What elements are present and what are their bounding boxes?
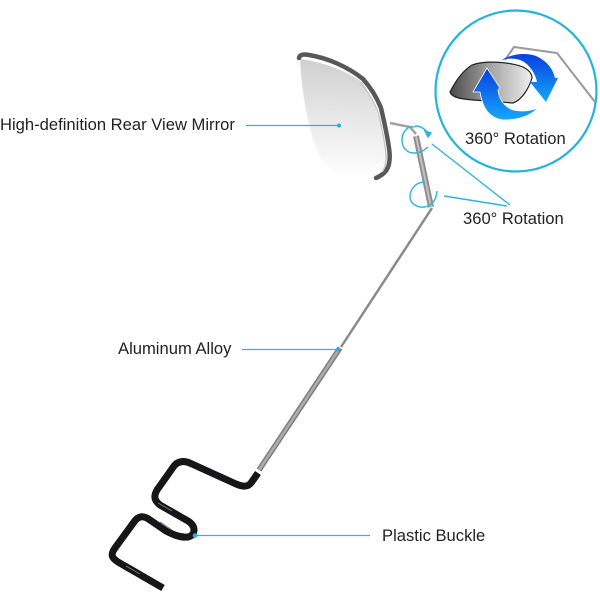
lower arm segment xyxy=(259,348,340,470)
mirror leader line xyxy=(246,124,341,128)
rotation indicators xyxy=(402,126,510,207)
label: plastic buckle: Plastic Buckle xyxy=(382,526,485,545)
inset mirror xyxy=(450,62,532,103)
upper rotation arc xyxy=(402,127,428,153)
mirror frame xyxy=(299,54,390,178)
inset label: 360° Rotation xyxy=(465,129,566,148)
metal arm xyxy=(259,123,432,470)
inset circle xyxy=(436,10,596,172)
inset wire xyxy=(505,47,595,102)
aluminum leader line xyxy=(242,348,340,352)
label: aluminum alloy xyxy=(118,339,340,358)
inset blue arrow left xyxy=(473,68,538,120)
lower rotation arc xyxy=(410,182,437,207)
callout: 360 rotation inset xyxy=(436,10,596,172)
label: aluminum alloy: Aluminum Alloy xyxy=(118,339,232,358)
mirror glass xyxy=(300,59,386,178)
inset blue arrow right xyxy=(500,54,558,102)
mirror inner edge highlight xyxy=(360,83,386,172)
label: plastic buckle xyxy=(193,526,485,545)
plastic buckle xyxy=(112,462,258,588)
upper arm segment xyxy=(416,136,431,207)
label: rotation: 360° Rotation xyxy=(463,209,564,228)
label: mirror: High-definition Rear View Mirror xyxy=(0,115,235,134)
mirror xyxy=(299,54,390,178)
buckle leader line xyxy=(193,533,370,538)
label: mirror xyxy=(0,115,341,134)
rotation leader lines xyxy=(432,144,510,206)
